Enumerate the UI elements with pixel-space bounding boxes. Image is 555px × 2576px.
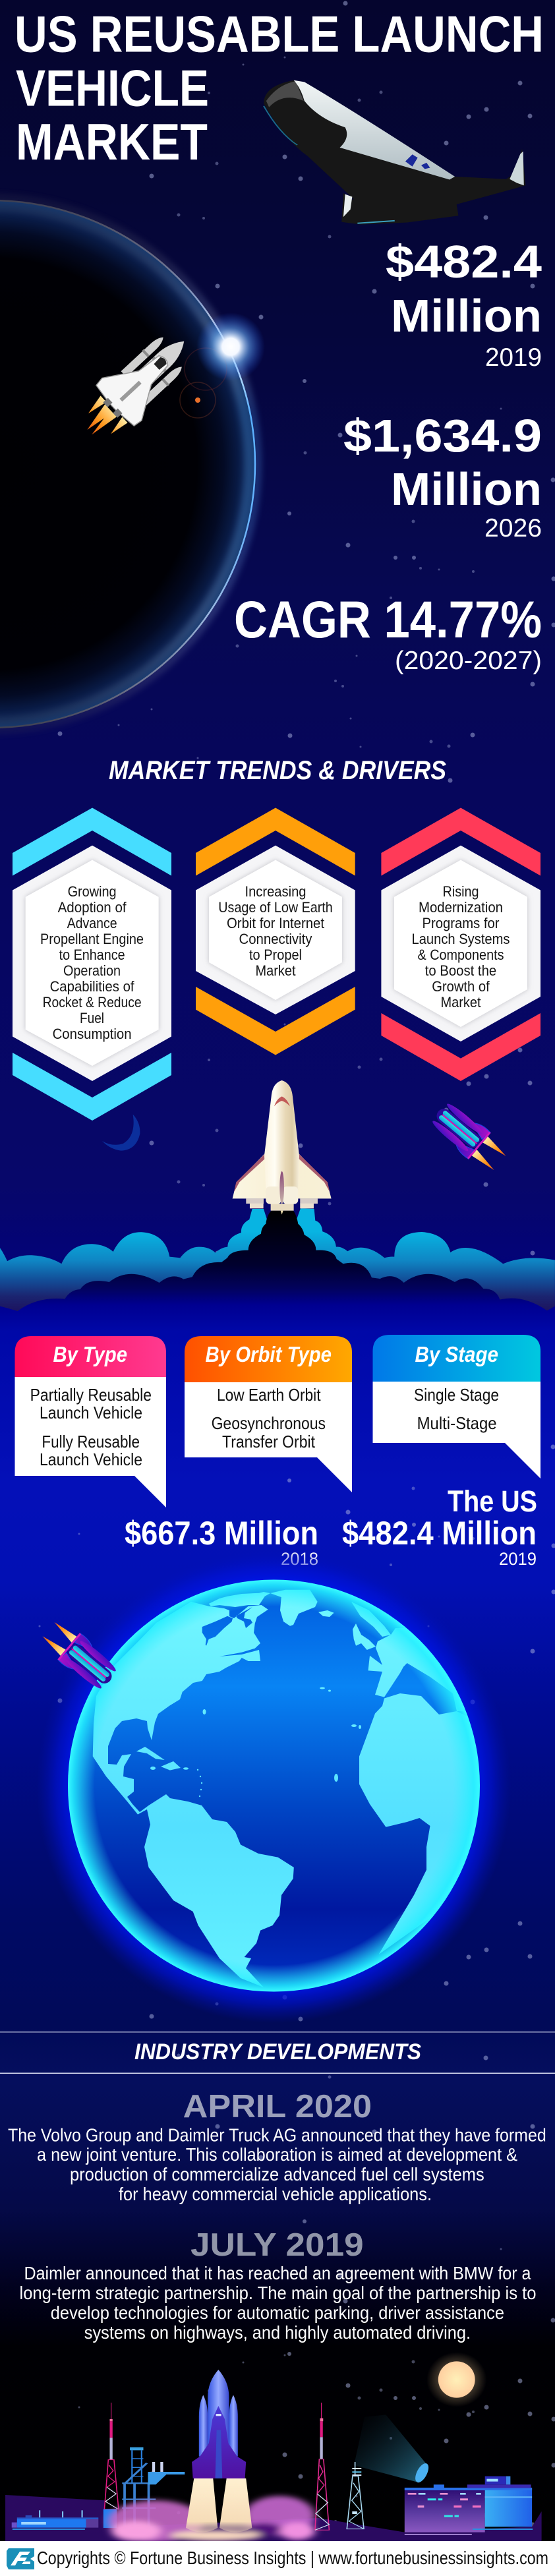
dark smoke [0, 1211, 555, 1332]
text: driver two: Orbit for Internet [227, 915, 325, 931]
launch tower scaffold [122, 2447, 185, 2527]
text: driver one: Advance [67, 915, 117, 931]
stat: 2018 value: 2018 [281, 1549, 318, 1569]
text: driver one: Capabilities of [50, 978, 134, 995]
icon: space shuttle [233, 1080, 332, 1215]
stat: 2019 market size [386, 236, 542, 372]
text: driver three: Rising [443, 883, 479, 900]
heading: by orbit type: By Orbit Type [206, 1342, 332, 1366]
stat: the US 2019 value: $482.4 Million [342, 1515, 537, 1552]
globe [37, 1548, 511, 2023]
icon: purple rocket right [427, 1098, 511, 1177]
text: driver three: Programs for [422, 915, 500, 931]
text: driver one: Consumption [53, 1026, 132, 1042]
icon: fortune business insights logo [7, 2548, 34, 2569]
text: driver one: Fuel [80, 1010, 104, 1026]
right building [405, 2476, 533, 2535]
planet with glowing rim [0, 198, 265, 730]
icon: launching rocket [186, 2370, 252, 2532]
text: driver two: Connectivity [239, 931, 312, 947]
text: driver two [218, 883, 333, 979]
icon: spaceplane [264, 80, 525, 225]
title: VEHICLE [16, 59, 209, 117]
heading: market trends and drivers: MARKET TRENDS & DRIVERS [109, 756, 446, 785]
clouds [0, 1208, 555, 1312]
text: driver three: & Components [418, 947, 504, 963]
development: july 2019: JULY 2019 [190, 2227, 364, 2263]
stat: 2019 market size: Million [391, 290, 542, 341]
stat: 2018 value: $667.3 Million [125, 1515, 318, 1552]
panel: by orbit type [185, 1336, 352, 1492]
list: stage segments: Multi-Stage [417, 1413, 497, 1433]
panel: by stage [373, 1335, 540, 1478]
right towers [315, 2403, 364, 2530]
panel: driver two [196, 808, 355, 1055]
text: driver one: to Enhance [59, 947, 125, 963]
launch smoke [108, 2496, 315, 2542]
heading: industry developments: INDUSTRY DEVELOPMENTS [134, 2039, 421, 2064]
icon: white rocket [69, 320, 204, 452]
heading: by type: By Type [53, 1342, 127, 1366]
text: driver three [411, 883, 510, 1010]
text: driver one: Adoption of [58, 899, 127, 916]
title: MARKET [16, 113, 208, 171]
stat: 2019 market size: 2019 [485, 343, 542, 372]
list: type segments: Partially Reusable [30, 1385, 152, 1405]
list: stage segments [414, 1385, 499, 1433]
stat: the US 2019 value [342, 1484, 537, 1569]
list: type segments: Fully Reusable [42, 1432, 140, 1451]
list: type segments [30, 1385, 152, 1469]
continents [93, 1590, 488, 1987]
text: driver two: Increasing [245, 883, 306, 900]
development: april 2020: APRIL 2020 [183, 2089, 372, 2124]
icon: search light [354, 2415, 431, 2483]
text: driver two: Usage of Low Earth [218, 899, 333, 916]
panel: by type [15, 1336, 166, 1508]
icon: purple rocket left [37, 1616, 121, 1694]
stat: 2026 market size: 2026 [484, 514, 542, 542]
text: driver three: Market [440, 994, 481, 1010]
text: july 2019 body: systems on highways, and highly automated driving. [84, 2322, 471, 2343]
development: april 2020 [8, 2089, 546, 2204]
launch site scene [5, 2352, 542, 2542]
text: july 2019 body [20, 2263, 537, 2343]
text: july 2019 body: develop technologies for automatic parking, driver assistance [51, 2302, 504, 2323]
left building [12, 2509, 117, 2530]
icon: full moon [426, 2352, 486, 2407]
stat: 2026 market size: $1,634.9 [343, 410, 542, 461]
list: orbit segments: Transfer Orbit [222, 1432, 316, 1451]
text: driver two: to Propel [249, 947, 302, 963]
list: orbit segments: Low Earth Orbit [217, 1385, 321, 1405]
list: orbit segments: Geosynchronous [212, 1413, 326, 1433]
stat: CAGR [234, 590, 542, 675]
text: driver three: Modernization [419, 899, 503, 916]
stat: CAGR: (2020-2027) [395, 647, 542, 675]
stat: 2019 market size: $482.4 [386, 236, 542, 287]
text: driver three: Growth of [432, 978, 490, 995]
development: july 2019 [20, 2227, 537, 2343]
text: driver one [40, 883, 144, 1042]
text: april 2020 body [8, 2124, 546, 2204]
ground [5, 2495, 542, 2541]
list: stage segments: Single Stage [414, 1385, 499, 1405]
list: orbit segments [212, 1385, 326, 1451]
stat: 2018 value [125, 1515, 318, 1569]
list: type segments: Launch Vehicle [40, 1449, 142, 1469]
stat: the US 2019 value: The US [448, 1484, 537, 1518]
left tower [104, 2403, 119, 2509]
panel: driver three [381, 808, 540, 1081]
stat: the US 2019 value: 2019 [499, 1549, 537, 1569]
heading: by stage: By Stage [415, 1342, 498, 1366]
text: driver two: Market [256, 962, 296, 979]
text: driver one: Operation [63, 962, 121, 979]
text: april 2020 body: production of commercialize advanced fuel cell systems [70, 2164, 484, 2184]
text: april 2020 body: for heavy commercial vehicle applications. [119, 2184, 432, 2204]
text: driver one: Propellant Engine [40, 931, 144, 947]
icon: crescent moon [102, 1115, 140, 1151]
text: driver one: Growing [68, 883, 117, 900]
text: driver one: Rocket & Reduce [43, 994, 142, 1010]
text: april 2020 body: a new joint venture. This collaboration is aimed at development & [37, 2144, 517, 2165]
list: type segments: Launch Vehicle [40, 1403, 142, 1422]
footer [0, 2541, 555, 2576]
panel: driver one [13, 808, 171, 1121]
stat: 2026 market size [343, 410, 542, 542]
stat: 2026 market size: Million [391, 463, 542, 515]
text: driver three: to Boost the [425, 962, 496, 979]
text: driver three: Launch Systems [411, 931, 510, 947]
title [15, 5, 544, 171]
